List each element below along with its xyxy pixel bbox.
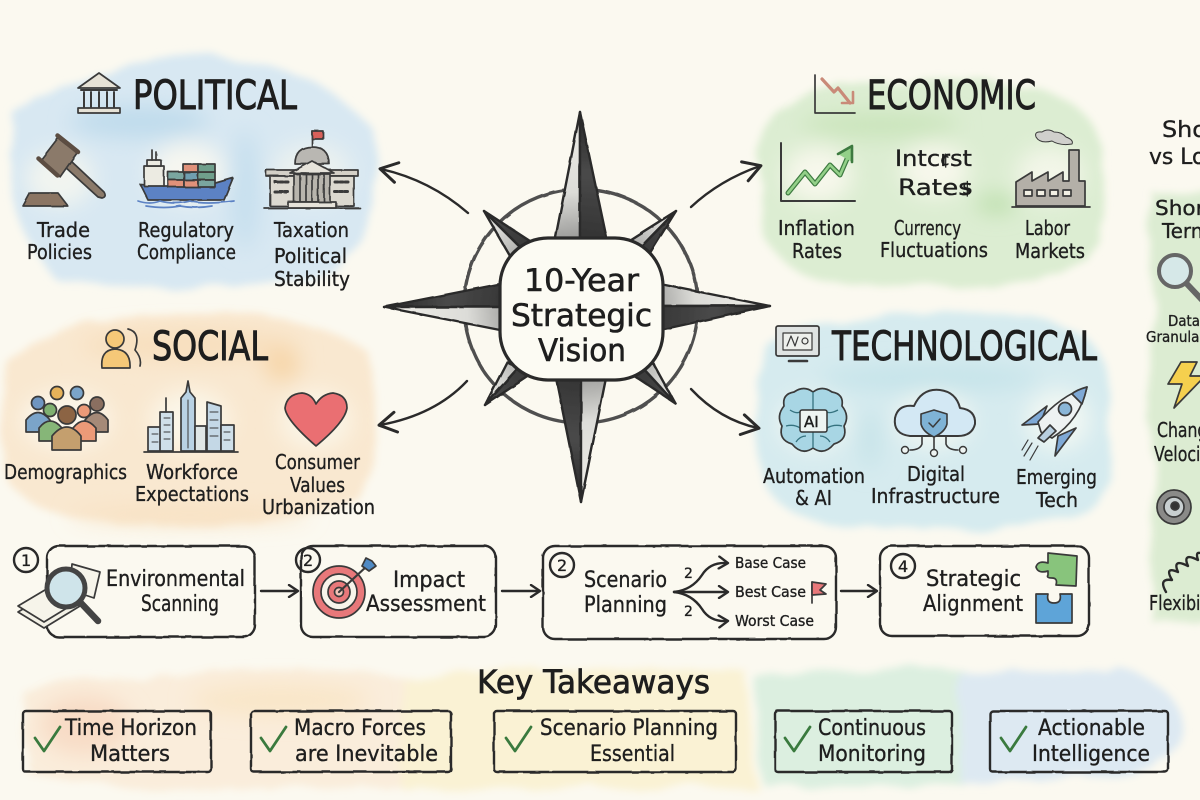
compass spikes bbox=[384, 112, 770, 502]
text: demographics: Demographics bbox=[4, 460, 127, 484]
step label bbox=[923, 567, 1023, 617]
text: labor markets: Markets bbox=[1015, 239, 1085, 263]
arrow: to economic bbox=[691, 166, 760, 207]
text: taxation, political stability: Stability bbox=[274, 267, 350, 291]
heading: Key Takeaways bbox=[477, 663, 710, 701]
scenario branches: 2 bbox=[684, 566, 693, 582]
text: digital infrastructure: Digital bbox=[907, 462, 965, 486]
text: regulatory compliance: Compliance bbox=[137, 240, 236, 264]
step number bbox=[14, 548, 38, 572]
step label: Strategic bbox=[926, 567, 1021, 592]
step label: Environmental bbox=[106, 567, 245, 592]
heading bbox=[1149, 118, 1200, 170]
icon: lightning bolt bbox=[1168, 362, 1200, 408]
check mark bbox=[1001, 727, 1026, 751]
heading: ECONOMIC bbox=[867, 73, 1036, 119]
text: workforce expectations: Workforce bbox=[146, 460, 238, 484]
text: interest rates sketch: Intcrst bbox=[895, 147, 972, 172]
card text: Matters bbox=[90, 742, 170, 767]
text: workforce expectations: Expectations bbox=[135, 482, 249, 506]
text: labor markets bbox=[1015, 216, 1085, 263]
text: taxation, political stability: Political bbox=[274, 244, 347, 268]
panel: technological bbox=[755, 312, 1111, 530]
text: workforce expectations bbox=[135, 460, 249, 506]
heading: TECHNOLOGICAL bbox=[831, 324, 1098, 370]
step label: Planning bbox=[584, 593, 667, 618]
takeaway card 5 bbox=[990, 711, 1168, 772]
arrow: step 1 to 2 bbox=[261, 590, 297, 592]
panel: economic bbox=[760, 73, 1104, 287]
takeaway card 4 bbox=[775, 711, 952, 772]
text: taxation, political stability: Taxation bbox=[273, 218, 349, 242]
card text bbox=[818, 716, 926, 767]
text: interest rates sketch: Rates bbox=[898, 176, 972, 201]
text: inflation rates: Rates bbox=[792, 239, 842, 263]
card text: Macro Forces bbox=[294, 716, 426, 741]
step number: 1 bbox=[21, 551, 31, 570]
card text bbox=[540, 716, 718, 767]
arrow: step 3 to 4 bbox=[841, 590, 876, 592]
divider rule bbox=[1142, 187, 1144, 625]
text: change velocity bbox=[1154, 418, 1200, 466]
icon: magnifier bbox=[1159, 255, 1200, 302]
icon: factory bbox=[1012, 130, 1090, 207]
panel: political bbox=[10, 54, 376, 291]
text: currency fluctuations: Fluctuations bbox=[880, 238, 988, 262]
step label: Impact bbox=[393, 568, 465, 593]
text: automation and AI bbox=[763, 464, 865, 510]
card text: Intelligence bbox=[1032, 742, 1150, 767]
icon: capitol building bbox=[264, 131, 360, 208]
icon: red flag bbox=[812, 582, 826, 603]
icon: puzzle pieces bbox=[1036, 553, 1077, 623]
process step 4 bbox=[880, 546, 1089, 636]
text: inflation rates bbox=[778, 216, 855, 263]
text: regulatory compliance bbox=[137, 218, 236, 264]
scenario labels: Base Case bbox=[735, 554, 806, 572]
text: trade policies bbox=[27, 218, 92, 264]
card text: Actionable bbox=[1038, 716, 1145, 741]
text: interest rates sketch bbox=[895, 147, 973, 201]
text: consumer values urbanization: Consumer bbox=[275, 450, 360, 474]
icon: heart bbox=[285, 393, 347, 446]
step label: Alignment bbox=[923, 592, 1023, 617]
text: regulatory compliance: Regulatory bbox=[138, 218, 234, 242]
section: key takeaways bbox=[23, 663, 1182, 790]
scenario labels: Best Case bbox=[735, 583, 806, 601]
step label bbox=[366, 568, 486, 617]
process step 2 bbox=[296, 546, 496, 637]
scenario labels: Worst Case bbox=[735, 612, 814, 630]
text: taxation, political stability bbox=[273, 218, 350, 291]
scenario labels bbox=[735, 554, 814, 630]
card text: Scenario Planning bbox=[540, 716, 718, 741]
text: digital infrastructure: Infrastructure bbox=[871, 484, 1000, 508]
text: consumer values urbanization bbox=[262, 450, 375, 519]
check mark bbox=[261, 727, 286, 751]
scenario branches bbox=[674, 563, 727, 621]
icon: AI brain: AI bbox=[804, 413, 819, 431]
step number: 2 bbox=[557, 556, 567, 575]
title bbox=[511, 263, 652, 369]
text: labor markets: Labor bbox=[1025, 216, 1070, 240]
card text: are Inevitable bbox=[295, 742, 438, 767]
process step 3 bbox=[543, 546, 836, 639]
card text bbox=[294, 716, 438, 767]
card text bbox=[64, 716, 197, 767]
step label bbox=[106, 567, 245, 617]
process step 1 bbox=[14, 546, 255, 637]
icon: people outline bbox=[102, 329, 140, 368]
card text: Essential bbox=[590, 742, 675, 767]
text: automation and AI: Automation bbox=[763, 464, 865, 488]
panel: social bbox=[1, 314, 375, 529]
text: trade policies: Policies bbox=[27, 240, 92, 264]
step number: 2 bbox=[303, 551, 313, 570]
compass ring bbox=[464, 189, 698, 423]
icon: bank building bbox=[78, 73, 120, 113]
card text bbox=[1032, 716, 1150, 767]
icon: city skyline bbox=[144, 381, 238, 452]
text: inflation rates: Inflation bbox=[778, 216, 855, 240]
check mark bbox=[506, 727, 531, 751]
text: emerging tech: Emerging bbox=[1016, 465, 1097, 489]
icon: monitor bbox=[776, 326, 819, 361]
icon: gavel bbox=[23, 136, 105, 206]
takeaway card 2 bbox=[251, 711, 451, 772]
text: interest rates sketch: ¢ bbox=[940, 150, 950, 169]
step number bbox=[296, 548, 320, 572]
arrow: to technological bbox=[691, 389, 758, 428]
card text: Monitoring bbox=[818, 742, 926, 767]
text: consumer values urbanization: Urbanization bbox=[262, 495, 375, 519]
step label: Scanning bbox=[141, 592, 219, 617]
title: Strategic bbox=[511, 298, 652, 334]
takeaway card 3 bbox=[494, 711, 736, 772]
icon: magnifier over papers bbox=[18, 564, 100, 628]
text: currency fluctuations: Currency bbox=[894, 216, 961, 240]
icon: rising line chart bbox=[781, 143, 855, 201]
title: 10-Year bbox=[524, 263, 639, 299]
step label: Scenario bbox=[584, 568, 667, 593]
text: short term bbox=[1155, 196, 1200, 243]
text: consumer values urbanization: Values bbox=[290, 473, 345, 497]
heading: POLITICAL bbox=[133, 73, 298, 119]
text: trade policies: Trade bbox=[36, 218, 90, 242]
icon: target bbox=[313, 558, 376, 618]
text: emerging tech bbox=[1016, 465, 1097, 512]
arrow: to social bbox=[380, 381, 467, 425]
panel: short vs long term bbox=[1143, 118, 1200, 625]
arrow: to political bbox=[381, 169, 468, 213]
icon: falling chart bbox=[815, 75, 855, 113]
title: Vision bbox=[538, 333, 626, 369]
card text: Time Horizon bbox=[64, 716, 197, 741]
icon: group of people bbox=[26, 386, 108, 450]
center badge bbox=[500, 238, 663, 380]
icon: cargo ship bbox=[138, 150, 234, 208]
text: digital infrastructure bbox=[871, 462, 1000, 508]
takeaway card 1 bbox=[23, 711, 211, 772]
arrow: step 2 to 3 bbox=[502, 590, 539, 592]
scenario branches: 2 bbox=[684, 604, 693, 620]
step number bbox=[891, 554, 915, 578]
step number: 4 bbox=[898, 557, 908, 576]
icon: rocket bbox=[1022, 387, 1087, 460]
step label bbox=[584, 568, 667, 618]
icon: spring bbox=[1163, 553, 1200, 592]
text: data granularity bbox=[1146, 312, 1200, 346]
icon: AI brain bbox=[779, 388, 847, 451]
text: automation and AI: & AI bbox=[795, 486, 832, 510]
text: currency fluctuations bbox=[880, 216, 988, 262]
step number bbox=[550, 553, 574, 577]
check mark bbox=[35, 727, 60, 751]
icon: cloud with shield bbox=[895, 390, 975, 456]
heading: SOCIAL bbox=[152, 324, 269, 370]
icon: lens bbox=[1157, 490, 1191, 524]
step label: Assessment bbox=[366, 592, 486, 617]
text: interest rates sketch: $ bbox=[962, 179, 973, 199]
check mark bbox=[785, 727, 810, 751]
center compass bbox=[384, 112, 770, 502]
text: emerging tech: Tech bbox=[1035, 488, 1078, 512]
card text: Continuous bbox=[818, 716, 926, 741]
